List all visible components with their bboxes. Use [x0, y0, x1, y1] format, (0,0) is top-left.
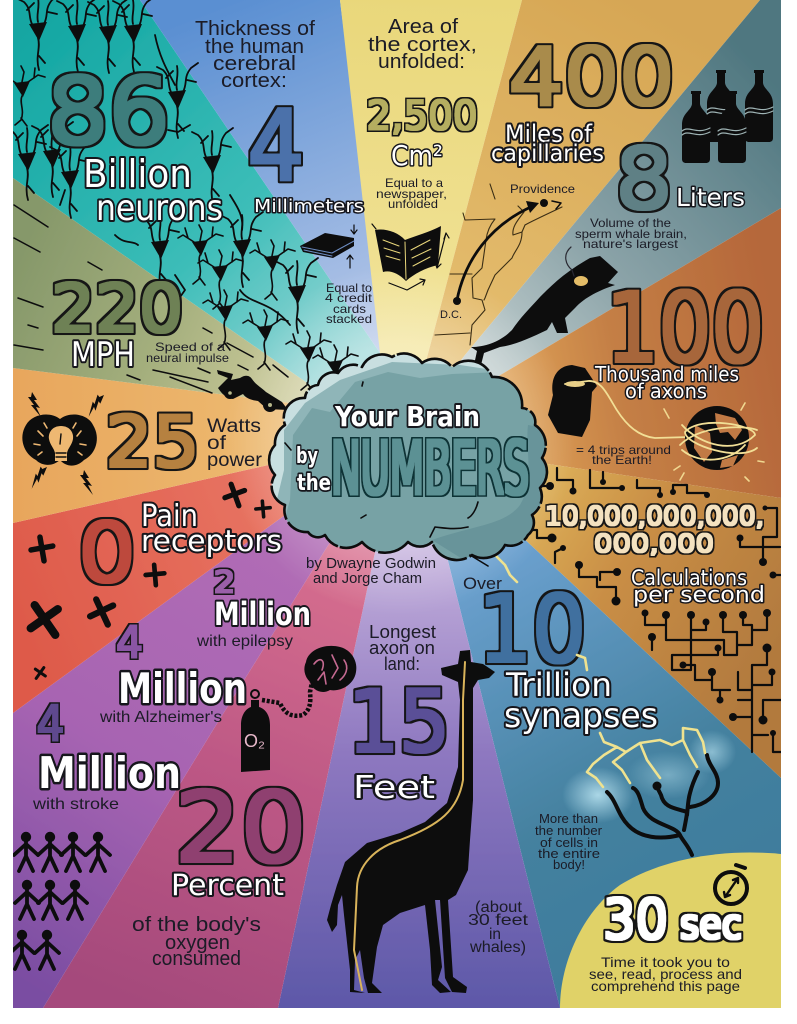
label: Thousand miles of axons: Thousand miles — [594, 362, 739, 386]
text: longest axon on land: Longest — [369, 622, 436, 642]
label: Providence: Providence — [510, 182, 575, 196]
stat: 2 million with epilepsy — [196, 566, 311, 650]
text: Thickness of the human cerebral cortex: cortex: — [221, 70, 287, 92]
big number 25: 25 — [106, 402, 200, 484]
text: of the body's oxygen consumed: oxygen — [165, 932, 230, 954]
panel: calculations per second — [520, 468, 781, 752]
text: equal to 4 credit cards stacked: cards — [333, 302, 366, 316]
panel: 8 liters — [471, 70, 773, 365]
panel: 10 trillion synapses — [463, 553, 736, 872]
big number 15: 15 — [348, 672, 450, 772]
stat: 4 million with stroke — [32, 696, 181, 813]
label: Billion neurons: neurons — [96, 188, 223, 229]
text: time it took to comprehend: see, read, process and — [589, 966, 742, 982]
text: of the body's oxygen consumed: of the body's — [132, 914, 261, 936]
stat: 2 million with epilepsy: Million — [214, 595, 311, 633]
text: equal to 4 credit cards stacked: stacked — [326, 312, 372, 326]
text: longest axon on land: land: — [384, 654, 420, 674]
label: Pain receptors: receptors — [141, 524, 282, 558]
icon: open newspaper — [372, 224, 449, 290]
big number: ten quadrillion: 000,000 — [594, 529, 714, 558]
label: Cm squared: Cm² — [391, 139, 443, 172]
label: Pain receptors: Pain — [141, 499, 198, 534]
text: volume of sperm whale brain: Volume of the — [590, 216, 671, 230]
stat: 4 million with Alzheimer's — [99, 618, 247, 726]
text: longest axon on land — [369, 622, 436, 674]
icon: rows of people — [10, 832, 110, 969]
text: time it took to comprehend — [589, 954, 742, 994]
label: Millimeters: Millimeters — [254, 196, 364, 217]
label: Calculations per second: Calculations — [631, 566, 747, 590]
heading: Your Brain: Your Brain — [334, 400, 480, 433]
label: Thousand miles of axons: of axons — [625, 379, 707, 403]
text: speed of a neural impulse — [146, 340, 229, 365]
panel: 15 feet longest axon — [327, 622, 529, 993]
text: of the body's oxygen consumed: consumed — [152, 948, 241, 970]
stat: 4 million with stroke: Million — [38, 748, 181, 799]
text: four trips around the Earth — [576, 446, 670, 464]
text: volume of sperm whale brain: nature's largest — [583, 237, 679, 251]
icon: stopwatch — [715, 865, 747, 904]
label: Pain receptors — [141, 499, 282, 558]
text: of the body's oxygen consumed — [132, 914, 261, 970]
label: watts of power — [207, 416, 263, 471]
heading: by the: the — [297, 471, 331, 496]
speed lines — [14, 205, 288, 393]
big number: ten quadrillion: 10,000,000,000, — [545, 502, 764, 532]
stat: 2 million with epilepsy: with epilepsy — [196, 633, 293, 650]
label: watts of power: power — [207, 450, 263, 471]
text: more than the number of cells: of cells in — [540, 835, 598, 850]
brain shape — [260, 354, 560, 570]
label: Percent: Percent — [171, 868, 284, 902]
panel: cortex area — [366, 16, 478, 290]
icon: oxygen tank with tube and brain — [241, 646, 356, 772]
label: Billion neurons — [84, 156, 224, 222]
text: speed of a neural impulse: Speed of a — [155, 340, 225, 354]
text: more than the number of cells: body! — [553, 857, 585, 872]
stat: 2 million with epilepsy: 2 — [214, 566, 236, 600]
text: volume of sperm whale brain — [575, 216, 687, 251]
stat: 4 million with stroke: 4 — [36, 696, 64, 752]
icon: circuit traces — [520, 468, 781, 752]
big number 20: 20 — [174, 772, 306, 884]
text: time it took to comprehend: Time it took you to — [601, 954, 730, 970]
icon: four bottles — [682, 70, 773, 163]
text: more than the number of cells: the entire — [538, 846, 600, 861]
label: Trillion synapses: synapses — [504, 696, 658, 736]
icon: plus marks — [22, 481, 270, 682]
icon: stack of credit cards — [300, 225, 357, 268]
text: Thickness of the human cerebral cortex: Thickness of — [195, 18, 315, 40]
panel: 400 miles of capillaries — [435, 32, 674, 345]
icon: head silhouette with axon — [548, 365, 690, 438]
label: watts of power: Watts — [207, 416, 261, 437]
text: more than the number of cells: the number — [535, 823, 603, 838]
big number 2,500: 2,500 — [366, 94, 478, 140]
text: four trips around the Earth: the Earth! — [592, 453, 652, 467]
text: more than the number of cells — [535, 811, 603, 872]
icon: racing car — [217, 370, 288, 412]
big number 400: 400 — [508, 32, 674, 124]
label: Miles of capillaries: capillaries — [491, 141, 604, 167]
panel: title brain — [260, 354, 560, 570]
text: about 30 feet in whales — [468, 899, 529, 956]
big number: ten quadrillion — [545, 502, 764, 558]
text: equal to a newspaper unfolded: Equal to a — [385, 176, 443, 190]
big number 220: 220 — [51, 270, 183, 348]
icon: Earth wrapped with axons — [664, 403, 764, 481]
text: volume of sperm whale brain: sperm whale brain, — [575, 227, 687, 241]
credit: authors — [306, 556, 436, 587]
text: equal to 4 credit cards stacked: Equal to — [326, 281, 372, 295]
icon: giraffe with axon — [327, 650, 495, 993]
big number 10: 10 — [478, 576, 586, 684]
credit: authors: by Dwayne Godwin — [306, 556, 436, 572]
label: Feet: Feet — [353, 770, 435, 806]
stat: 4 million with Alzheimer's: 4 — [116, 618, 143, 668]
label: Thousand miles of axons — [594, 364, 740, 400]
text: Area of the cortex, unfolded: Area of — [388, 16, 458, 38]
label: Liters: Liters — [676, 183, 745, 212]
label: Miles of capillaries: Miles of — [505, 120, 593, 148]
panel: 86 billion neurons — [0, 0, 358, 405]
label: MPH: MPH — [71, 335, 135, 375]
yellow corner shape — [560, 852, 781, 1008]
text: equal to a newspaper unfolded: unfolded — [388, 197, 438, 211]
text: Thickness of the human cerebral cortex: cerebral — [213, 53, 296, 75]
big number 4: 4 — [248, 90, 304, 202]
panel: 220 mph — [14, 205, 288, 412]
icon: sperm whale — [471, 247, 618, 365]
label: watts of power: of — [207, 433, 227, 454]
stat: 4 million with Alzheimer's: with Alzheimer's — [99, 709, 222, 726]
text: four trips around the Earth: = 4 trips around — [576, 443, 671, 457]
big text: 30 sec: 30 — [603, 888, 668, 952]
panel: cortex thickness — [195, 18, 373, 326]
label: Trillion synapses — [504, 666, 658, 736]
text: equal to a newspaper unfolded: newspaper, — [376, 187, 447, 201]
panel: 100 thousand miles of axons — [548, 272, 764, 481]
icon: neuron field — [0, 0, 358, 405]
label: Calculations per second — [631, 566, 765, 608]
glow behind synapses — [562, 730, 736, 823]
text: more than the number of cells: More than — [539, 811, 598, 826]
text: about 30 feet in whales: (about — [475, 899, 523, 916]
label: Miles of capillaries — [491, 120, 604, 167]
text: about 30 feet in whales: 30 feet — [468, 912, 529, 929]
icon: brain with light bulb and bolts — [22, 392, 109, 495]
text: equal to 4 credit cards stacked: 4 credit — [325, 291, 373, 305]
panel: neurological conditions — [10, 566, 311, 969]
heading: by the: by — [296, 444, 318, 469]
text: Area of the cortex, unfolded — [368, 18, 475, 68]
big number 0: 0 — [78, 506, 136, 602]
label: Billion neurons: Billion — [83, 152, 192, 196]
big text: 30 sec: sec — [680, 900, 742, 948]
text: Area of the cortex, unfolded: unfolded: — [378, 51, 465, 73]
label: D.C.: D.C. — [440, 309, 462, 321]
label: O2: O₂ — [244, 731, 265, 751]
text: time it took to comprehend: comprehend this page — [591, 978, 740, 994]
text: longest axon on land: axon on — [369, 638, 435, 658]
big number 8: 8 — [616, 130, 672, 230]
stat: 4 million with Alzheimer's: Million — [118, 664, 247, 713]
heading: NUMBERS: NUMBERS — [331, 426, 529, 512]
label: Trillion synapses: Trillion — [505, 666, 612, 704]
map: Washington D.C. to Providence — [435, 182, 575, 345]
heading: by the — [296, 444, 331, 496]
text: Thickness of the human cerebral cortex — [196, 20, 315, 87]
credit: authors: and Jorge Cham — [313, 571, 422, 587]
big text: 30 sec — [603, 888, 742, 952]
text: Area of the cortex, unfolded: the cortex, — [368, 34, 477, 56]
label: Over: Over — [463, 574, 502, 593]
panel: 25 watts of power — [22, 392, 263, 495]
text: equal to a newspaper unfolded — [376, 178, 446, 208]
stat: 4 million with stroke: with stroke — [32, 796, 119, 813]
text: about 30 feet in whales: in — [489, 926, 501, 943]
icon: axon tree and yellow dendrites — [493, 553, 718, 855]
label: Calculations per second: per second — [633, 583, 765, 608]
big number 86: 86 — [47, 58, 170, 166]
panel: 20 percent oxygen — [132, 646, 356, 970]
text: about 30 feet in whales: whales) — [469, 939, 526, 956]
text: speed of a neural impulse: neural impulse — [146, 351, 229, 365]
panel: 30 seconds — [560, 852, 781, 1008]
text: Thickness of the human cerebral cortex: the human — [205, 36, 304, 58]
panel: 0 pain receptors — [22, 481, 282, 682]
text: equal to 4 credit cards stacked — [325, 284, 372, 323]
big number 100: 100 — [606, 272, 764, 384]
